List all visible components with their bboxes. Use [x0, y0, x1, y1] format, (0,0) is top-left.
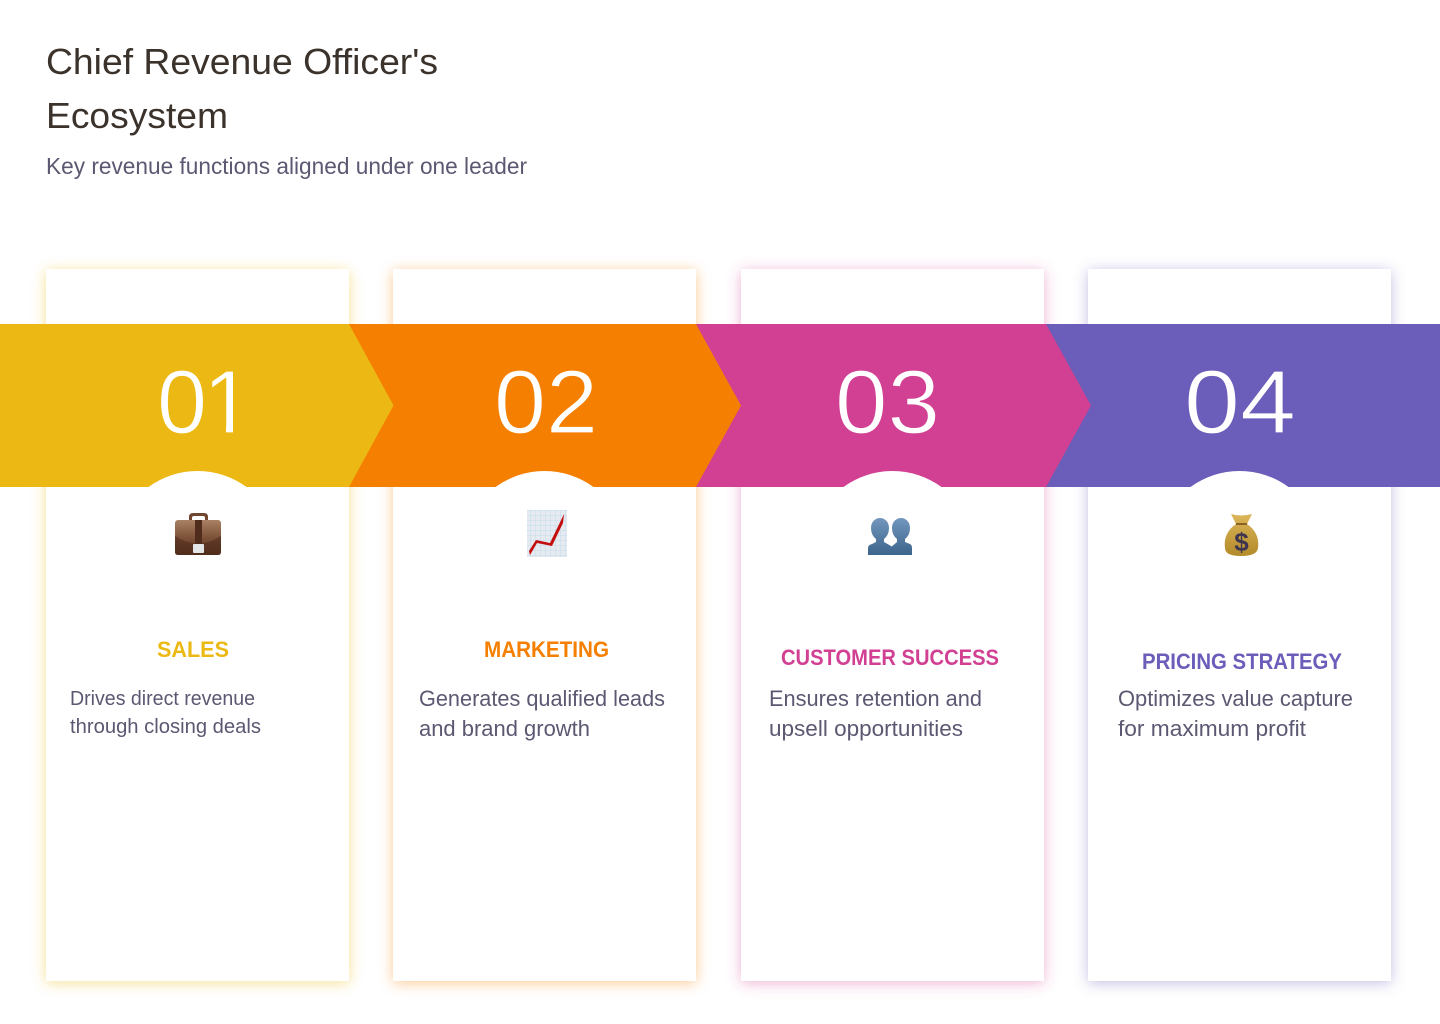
number 03: 03 — [835, 353, 940, 453]
description: pricing strategy — [1118, 686, 1353, 741]
arrow band 02 — [349, 324, 741, 487]
title: Ecosystem — [46, 95, 228, 136]
description: pricing strategy: Optimizes value capture — [1118, 686, 1353, 711]
icon: chart increasing — [527, 510, 567, 557]
arrow band 03 — [696, 324, 1091, 487]
title — [46, 41, 438, 136]
description: customer success: Ensures retention and — [769, 686, 982, 711]
description: sales: Drives direct revenue — [70, 688, 255, 710]
description: marketing: Generates qualified leads — [419, 686, 665, 711]
description: pricing strategy: for maximum profit — [1118, 716, 1306, 741]
icon badge caps — [148, 471, 1288, 487]
description: sales — [70, 688, 261, 738]
title: Chief Revenue Officer's — [46, 41, 438, 82]
icon: money bag: $ — [1234, 527, 1249, 557]
panel: marketing — [393, 269, 696, 981]
description: sales: through closing deals — [70, 716, 261, 738]
description: customer success: upsell opportunities — [769, 716, 963, 741]
number 02: 02 — [494, 353, 598, 453]
icon: busts in silhouette — [868, 518, 912, 555]
heading: customer success: CUSTOMER SUCCESS — [781, 645, 999, 670]
panel: sales — [46, 269, 349, 981]
icon: briefcase — [175, 513, 221, 555]
number 04: 04 — [1184, 353, 1296, 453]
panel: customer success — [741, 269, 1044, 981]
description: marketing: and brand growth — [419, 716, 590, 741]
subtitle: Key revenue functions aligned under one leader — [46, 153, 527, 179]
arrow band 01 — [0, 324, 394, 487]
arrow band 04 — [1046, 324, 1440, 487]
panel: pricing strategy — [1088, 269, 1391, 981]
number 01: 01 — [157, 353, 253, 453]
description: customer success — [769, 686, 982, 741]
heading: pricing strategy: PRICING STRATEGY — [1142, 649, 1342, 674]
heading: sales: SALES — [157, 637, 229, 662]
description: marketing — [419, 686, 665, 741]
icon: money bag — [1225, 514, 1258, 557]
heading: marketing: MARKETING — [484, 637, 609, 662]
